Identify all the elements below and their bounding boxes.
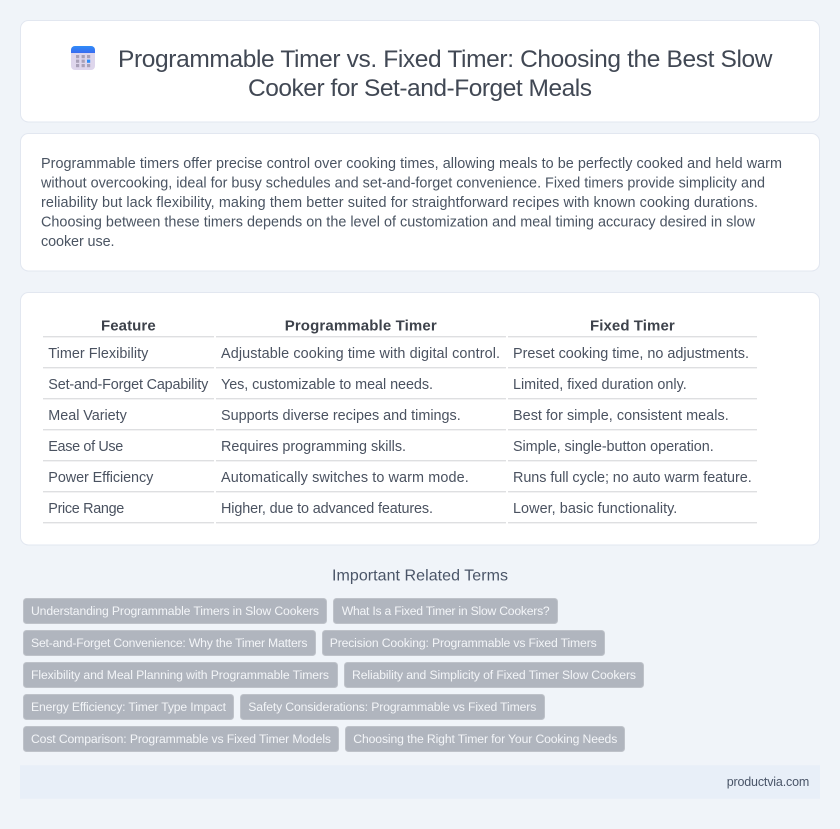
row: price range: Higher, due to advanced features. bbox=[221, 501, 433, 517]
tag: Cost Comparison: Programmable vs Fixed Timer Models bbox=[31, 732, 331, 746]
table header: Programmable Timer bbox=[285, 318, 437, 334]
title: Cooker for Set-and-Forget Meals bbox=[248, 75, 592, 102]
tag: Energy Efficiency: Timer Type Impact bbox=[31, 700, 227, 714]
row: set-and-forget capability: Set-and-Forget Capability bbox=[48, 377, 209, 393]
tag: Set-and-Forget Convenience: Why the Timer Matters bbox=[31, 636, 308, 650]
row: power efficiency: Power Efficiency bbox=[48, 470, 154, 486]
row: timer flexibility: Preset cooking time, no adjustments. bbox=[513, 346, 749, 362]
row: meal variety: Best for simple, consistent meals. bbox=[513, 408, 729, 424]
row: power efficiency: Automatically switches to warm mode. bbox=[221, 470, 469, 486]
row: timer flexibility bbox=[48, 346, 749, 362]
tag: Choosing the Right Timer for Your Cooking Needs bbox=[353, 732, 617, 746]
row: meal variety: Supports diverse recipes and timings. bbox=[221, 408, 461, 424]
row: meal variety bbox=[48, 408, 729, 424]
text block: summary: without overcooking, ideal for busy schedules and set-and-forget convenience. Fixed timers provide simplicity and bbox=[40, 176, 765, 192]
tag bbox=[24, 662, 338, 688]
icon: calendar timer bbox=[71, 46, 95, 70]
tag: Understanding Programmable Timers in Slow Cookers bbox=[31, 604, 319, 618]
tag bbox=[24, 694, 234, 720]
text block: summary: Programmable timers offer precise control over cooking times, allowing meals to be perfectly cooked and held warm bbox=[41, 156, 782, 172]
table header bbox=[101, 318, 675, 334]
row: set-and-forget capability bbox=[48, 377, 687, 393]
row: ease of use bbox=[48, 439, 714, 455]
heading: important related terms: Important Related Terms bbox=[332, 568, 508, 584]
title bbox=[118, 46, 773, 102]
tag: Safety Considerations: Programmable vs Fixed Timers bbox=[248, 700, 536, 714]
tag bbox=[24, 630, 316, 656]
text block: summary: reliability but lack flexibility, making them better suited for straightforward recipes with known cooking durations. bbox=[41, 195, 758, 211]
table header: Feature bbox=[101, 318, 156, 334]
row: price range: Price Range bbox=[48, 501, 124, 517]
tag: Flexibility and Meal Planning with Programmable Timers bbox=[31, 668, 329, 682]
panel: title header bbox=[20, 20, 820, 122]
table header: Fixed Timer bbox=[590, 318, 675, 334]
tag bbox=[24, 726, 338, 752]
tag: Precision Cooking: Programmable vs Fixed Timers bbox=[330, 636, 597, 650]
row: power efficiency: Runs full cycle; no auto warm feature. bbox=[513, 470, 752, 486]
related terms tags bbox=[24, 598, 644, 752]
panel: summary paragraph bbox=[20, 134, 820, 271]
row: price range bbox=[48, 501, 677, 517]
row: ease of use: Ease of Use bbox=[48, 439, 123, 455]
row: meal variety: Meal Variety bbox=[48, 408, 128, 424]
row: timer flexibility: Timer Flexibility bbox=[48, 346, 149, 362]
text block: summary bbox=[40, 156, 782, 250]
footer bar bbox=[20, 765, 820, 799]
row: power efficiency bbox=[48, 470, 752, 486]
tag bbox=[344, 662, 644, 688]
tag bbox=[24, 598, 326, 624]
row: set-and-forget capability: Limited, fixed duration only. bbox=[513, 377, 687, 393]
row: price range: Lower, basic functionality. bbox=[513, 501, 677, 517]
tag: Reliability and Simplicity of Fixed Timer Slow Cookers bbox=[352, 668, 636, 682]
footer bar: productvia.com bbox=[727, 775, 809, 789]
tag bbox=[346, 726, 624, 752]
title: Programmable Timer vs. Fixed Timer: Choosing the Best Slow bbox=[118, 46, 773, 73]
text block: summary: Choosing between these timers depends on the level of customization and meal timing accuracy desired in slow bbox=[41, 214, 756, 230]
tag bbox=[322, 630, 604, 656]
row: set-and-forget capability: Yes, customizable to meal needs. bbox=[221, 377, 433, 393]
row: ease of use: Requires programming skills. bbox=[221, 439, 406, 455]
tag bbox=[240, 694, 544, 720]
text block: summary: cooker use. bbox=[41, 234, 114, 250]
row: timer flexibility: Adjustable cooking time with digital control. bbox=[221, 346, 500, 362]
tag bbox=[334, 598, 558, 624]
panel: comparison table bbox=[20, 292, 820, 545]
tag: What Is a Fixed Timer in Slow Cookers? bbox=[342, 604, 550, 618]
row: ease of use: Simple, single-button operation. bbox=[513, 439, 714, 455]
